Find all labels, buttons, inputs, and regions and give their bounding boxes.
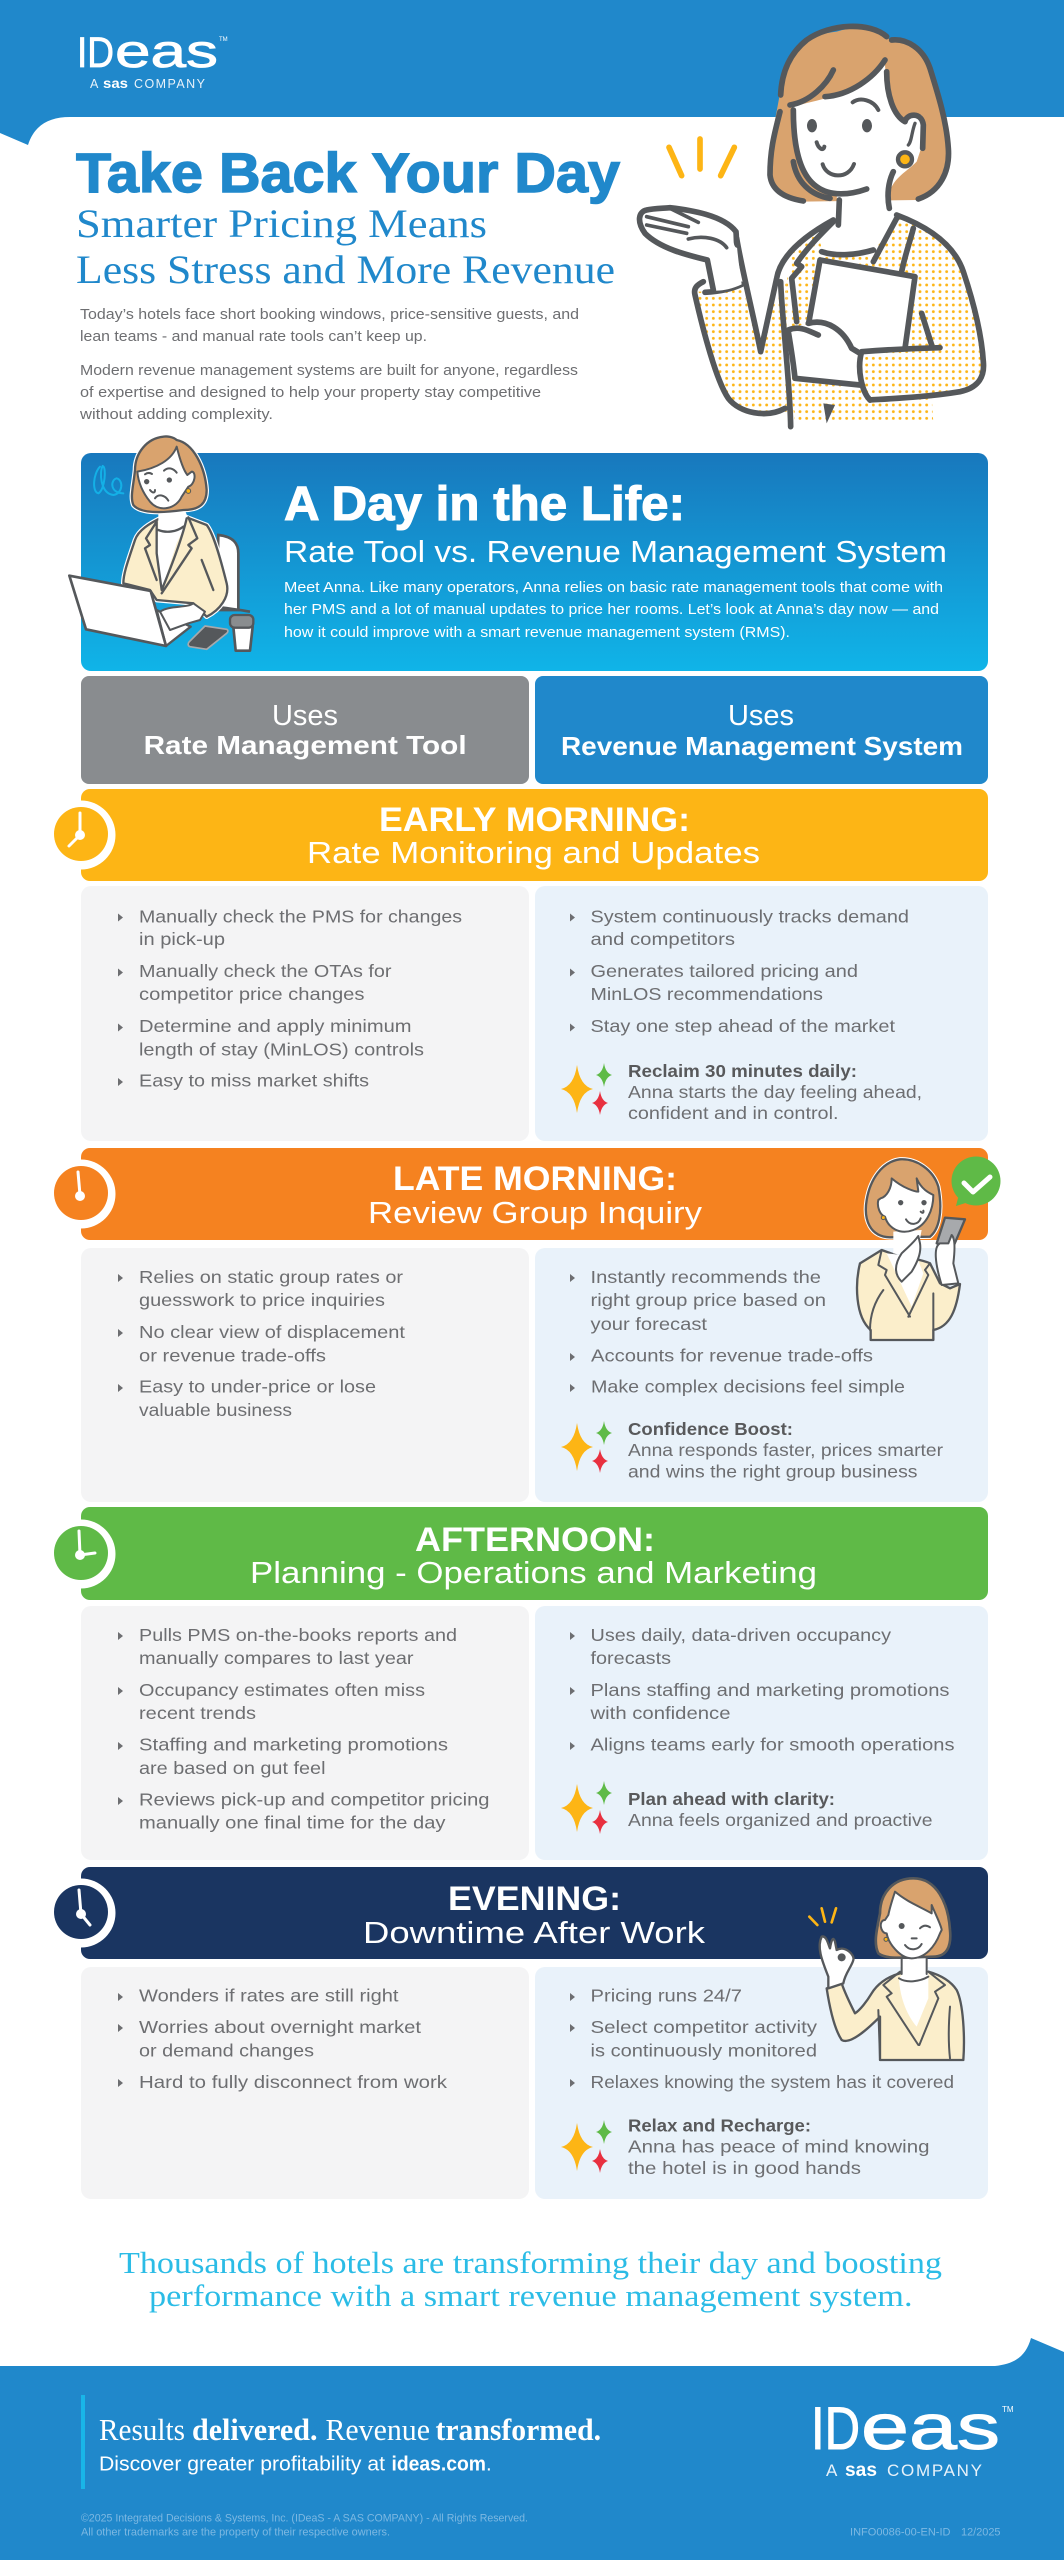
logo: IDeaS: sas xyxy=(103,75,128,91)
footer logo xyxy=(811,2391,1014,2481)
panel: afternoon, rate tool: Pulls PMS on-the-books reports and xyxy=(139,1625,457,1645)
banner: early morning: EARLY MORNING: xyxy=(379,801,690,839)
panel: early morning, rate tool: competitor price changes xyxy=(139,984,365,1004)
callout xyxy=(628,1789,932,1830)
column header: Rate Management Tool: Rate Management Tool xyxy=(144,730,467,760)
panel: afternoon, rate tool: Reviews pick-up and competitor pricing xyxy=(139,1790,490,1810)
panel: afternoon, RMS xyxy=(535,1606,988,1860)
callout: Anna responds faster, prices smarter xyxy=(628,1440,943,1460)
footer tagline xyxy=(81,2395,601,2489)
title: Take Back Your Day xyxy=(76,141,620,204)
legal text: ©2025 Integrated Decisions & Systems, Inc. (IDeaS - A SAS COMPANY) - All Rights Reserved. xyxy=(81,2512,528,2524)
callout: Anna starts the day feeling ahead, xyxy=(628,1082,922,1102)
cup xyxy=(233,627,253,651)
legal text: INFO0086-00-EN-ID xyxy=(850,2526,951,2538)
legal text: 12/2025 xyxy=(961,2526,1000,2538)
panel: late morning, rate tool: Easy to under-price or lose xyxy=(139,1376,376,1396)
header band xyxy=(0,0,1064,145)
column header: Rate Management Tool: Uses xyxy=(272,700,338,732)
hair xyxy=(876,1878,950,1958)
panel: early morning, rate tool: Manually check the OTAs for xyxy=(139,961,392,981)
description xyxy=(284,580,943,641)
closing statement xyxy=(119,2245,942,2313)
OK hand xyxy=(820,1936,854,1988)
neck xyxy=(893,1230,922,1257)
icon: sparkles xyxy=(561,2120,612,2173)
panel: afternoon, rate tool: manually one final time for the day xyxy=(139,1812,446,1832)
table line xyxy=(157,598,250,612)
shirt xyxy=(887,1253,923,1307)
panel: evening, RMS: Pricing runs 24/7 xyxy=(590,1986,742,2006)
illustration: Anna OK sign xyxy=(809,1878,964,2060)
panel: afternoon, RMS: forecasts xyxy=(590,1648,671,1668)
footer logo: TM xyxy=(1002,2405,1014,2414)
panel: afternoon, rate tool: are based on gut feel xyxy=(139,1758,326,1778)
panel: late morning, RMS: Make complex decisions feel simple xyxy=(591,1376,905,1396)
intro text: Today’s hotels face short booking windows, price-sensitive guests, and xyxy=(80,306,579,323)
logo: IDeaS: TM xyxy=(219,37,228,43)
intro text: Modern revenue management systems are built for anyone, regardless xyxy=(80,362,578,379)
callout: Relax and Recharge: xyxy=(628,2116,811,2136)
banner: early morning xyxy=(46,789,988,881)
subheading: Rate Tool vs. Revenue Management System xyxy=(284,534,947,569)
holding hand xyxy=(788,325,863,388)
icon: clock xyxy=(46,800,116,870)
column header: Rate Management Tool xyxy=(81,676,529,784)
logo: IDeaS: ID xyxy=(77,29,114,77)
closing statement: Thousands of hotels are transforming their day and boosting xyxy=(119,2245,942,2280)
panel: early morning, rate tool: in pick-up xyxy=(139,929,225,949)
shirt xyxy=(157,507,188,590)
panel: evening, rate tool xyxy=(81,1967,529,2199)
panel: afternoon, rate tool: Occupancy estimates often miss xyxy=(139,1680,425,1700)
panel: evening, RMS xyxy=(535,1967,988,2199)
banner: afternoon: AFTERNOON: xyxy=(415,1521,655,1559)
panel: late morning, rate tool: No clear view of displacement xyxy=(139,1322,405,1342)
panel: early morning, rate tool: Determine and apply minimum xyxy=(139,1016,412,1036)
panel: evening, rate tool: Wonders if rates are still right xyxy=(139,1986,399,2006)
banner: evening: Downtime After Work xyxy=(363,1915,706,1950)
description: her PMS and a lot of manual updates to price her rooms. Let’s look at Anna’s day now — and xyxy=(284,602,939,618)
description: Meet Anna. Like many operators, Anna relies on basic rate management tools that come with xyxy=(284,580,943,596)
clipboard xyxy=(808,260,915,358)
panel: late morning, RMS: right group price based on xyxy=(590,1290,826,1310)
panel: early morning, RMS xyxy=(535,886,988,1141)
hair xyxy=(770,28,948,202)
callout xyxy=(628,2116,930,2178)
legal text: All other trademarks are the property of their respective owners. xyxy=(81,2526,390,2538)
callout xyxy=(628,1419,943,1482)
callout: the hotel is in good hands xyxy=(628,2158,861,2178)
icon: clock xyxy=(46,1160,116,1228)
icon: clock xyxy=(46,1520,116,1588)
footer tagline: transformed. xyxy=(436,2412,601,2447)
intro text: lean teams - and manual rate tools can’t keep up. xyxy=(80,328,427,345)
panel: A Day in the Life xyxy=(81,453,988,671)
panel: evening, RMS: Relaxes knowing the system has it covered xyxy=(590,2072,954,2092)
raised sleeve xyxy=(695,278,787,414)
panel: evening, rate tool: Worries about overnight market xyxy=(139,2017,421,2037)
panel: early morning, rate tool: Manually check the PMS for changes xyxy=(139,906,462,926)
rays xyxy=(809,1908,836,1925)
panel: late morning, RMS xyxy=(535,1248,988,1502)
footer logo: eas xyxy=(861,2391,1000,2463)
hair xyxy=(132,436,207,512)
banner: late morning xyxy=(46,1148,988,1240)
panel: afternoon, RMS: Aligns teams early for smooth operations xyxy=(590,1734,955,1754)
callout: Plan ahead with clarity: xyxy=(628,1789,835,1809)
pointing hand xyxy=(896,1236,920,1282)
panel: late morning, rate tool: guesswork to price inquiries xyxy=(139,1290,385,1310)
intro text: without adding complexity. xyxy=(79,406,273,423)
logo: IDeaS: eas xyxy=(115,25,218,77)
logo: IDeaS xyxy=(77,25,228,91)
jacket xyxy=(123,517,227,617)
panel: early morning, RMS: and competitors xyxy=(590,929,735,949)
panel: afternoon, rate tool: recent trends xyxy=(139,1703,256,1723)
footer logo: COMPANY xyxy=(887,2461,982,2480)
illustration: Anna on phone xyxy=(857,1159,965,1340)
typing hand xyxy=(160,603,205,630)
phone hand xyxy=(936,1235,958,1285)
rays xyxy=(669,139,734,176)
footer band xyxy=(0,2338,1064,2560)
banner: afternoon xyxy=(46,1507,988,1600)
panel: afternoon, RMS: Plans staffing and marketing promotions xyxy=(590,1680,950,1700)
panel: afternoon, rate tool xyxy=(81,1606,529,1860)
face xyxy=(137,447,195,508)
subtitle: Smarter Pricing Means xyxy=(76,201,487,246)
footer tagline: Discover greater profitability at xyxy=(99,2452,385,2476)
phone xyxy=(188,626,228,649)
panel: late morning, RMS: Accounts for revenue trade-offs xyxy=(591,1346,873,1366)
logo: IDeaS: A xyxy=(90,77,99,91)
face xyxy=(881,1892,942,1958)
panel: late morning, rate tool xyxy=(81,1248,529,1502)
phone xyxy=(937,1218,965,1247)
footer tagline: Results xyxy=(99,2412,185,2447)
footer logo: sas xyxy=(845,2460,877,2481)
subtitle xyxy=(76,201,615,292)
panel: early morning, RMS: Stay one step ahead of the market xyxy=(590,1016,895,1036)
legal text xyxy=(81,2512,1000,2538)
jacket lines xyxy=(695,215,984,427)
panel: early morning, rate tool: length of stay (MinLOS) controls xyxy=(139,1040,424,1060)
icon: clock xyxy=(46,1878,116,1948)
banner: late morning: Review Group Inquiry xyxy=(368,1195,703,1230)
laptop keyboard xyxy=(157,610,191,646)
panel: evening, rate tool: Hard to fully disconnect from work xyxy=(139,2072,447,2092)
banner: evening xyxy=(46,1867,988,1959)
intro text: of expertise and designed to help your property stay competitive xyxy=(80,384,541,401)
callout: Anna feels organized and proactive xyxy=(628,1810,932,1830)
banner: late morning: LATE MORNING: xyxy=(393,1160,677,1198)
panel: evening, rate tool: or demand changes xyxy=(139,2040,314,2060)
banner: afternoon: Planning - Operations and Marketing xyxy=(250,1555,817,1590)
panel: afternoon, rate tool: manually compares to last year xyxy=(139,1648,414,1668)
column header: Revenue Management System xyxy=(535,676,988,784)
callout: Reclaim 30 minutes daily: xyxy=(628,1061,857,1081)
panel: early morning, RMS: MinLOS recommendations xyxy=(590,984,823,1004)
icon: sparkles xyxy=(561,1421,612,1473)
panel: early morning, rate tool xyxy=(81,886,529,1141)
footer tagline: Revenue xyxy=(326,2412,430,2447)
panel: late morning, rate tool: Relies on static group rates or xyxy=(139,1267,403,1287)
hair xyxy=(866,1159,940,1237)
callout: Anna has peace of mind knowing xyxy=(628,2136,930,2156)
jacket xyxy=(827,1972,964,2060)
panel: late morning, RMS: Instantly recommends the xyxy=(590,1267,821,1287)
footer tagline: ideas.com xyxy=(392,2452,486,2476)
illustration: Anna at laptop xyxy=(69,436,253,651)
illustration: Anna presenting xyxy=(640,26,984,427)
laptop screen xyxy=(69,576,166,646)
panel: late morning, rate tool: or revenue trade-offs xyxy=(139,1346,326,1366)
face xyxy=(878,1178,933,1232)
face xyxy=(793,65,923,255)
panel: afternoon, rate tool: Staffing and marketing promotions xyxy=(139,1734,448,1754)
description: how it could improve with a smart revenue management system (RMS). xyxy=(284,625,790,641)
panel: afternoon, RMS: Uses daily, data-driven occupancy xyxy=(590,1625,891,1645)
icon: sparkles xyxy=(561,1063,612,1115)
panel: evening, RMS: is continuously monitored xyxy=(590,2040,817,2060)
panel: early morning, RMS: System continuously tracks demand xyxy=(590,906,909,926)
chair xyxy=(217,535,238,610)
logo: IDeaS: COMPANY xyxy=(134,77,206,91)
squiggle xyxy=(94,466,123,495)
panel: afternoon, RMS: with confidence xyxy=(589,1703,730,1723)
icon: sparkles xyxy=(561,1781,612,1834)
jacket xyxy=(857,1250,960,1340)
callout: confident and in control. xyxy=(628,1103,838,1123)
banner: early morning: Rate Monitoring and Updates xyxy=(307,835,760,870)
icon: check bubble xyxy=(952,1156,1000,1206)
panel: late morning, rate tool: valuable business xyxy=(139,1400,292,1420)
raised hand xyxy=(640,208,742,291)
footer tagline: delivered. xyxy=(192,2412,318,2447)
footer tagline: . xyxy=(486,2452,492,2476)
panel: late morning, RMS: your forecast xyxy=(590,1314,707,1334)
panel: evening, RMS: Select competitor activity xyxy=(590,2017,817,2037)
column header: Revenue Management System: Revenue Management System xyxy=(561,731,963,761)
callout: Confidence Boost: xyxy=(628,1419,793,1439)
subtitle: Less Stress and More Revenue xyxy=(76,247,615,292)
heading: A Day in the Life: xyxy=(284,478,685,531)
jacket body xyxy=(787,218,983,423)
footer logo: ID xyxy=(811,2395,860,2462)
footer logo: A xyxy=(826,2461,838,2480)
panel: early morning, RMS: Generates tailored pricing and xyxy=(590,961,858,981)
intro text xyxy=(79,306,579,423)
callout xyxy=(628,1061,922,1123)
panel: early morning, rate tool: Easy to miss market shifts xyxy=(139,1070,369,1090)
neck and shirt xyxy=(899,1957,928,2027)
closing statement: performance with a smart revenue management system. xyxy=(149,2278,912,2313)
column header: Revenue Management System: Uses xyxy=(728,700,794,732)
callout: and wins the right group business xyxy=(628,1462,918,1482)
banner: evening: EVENING: xyxy=(448,1880,621,1918)
